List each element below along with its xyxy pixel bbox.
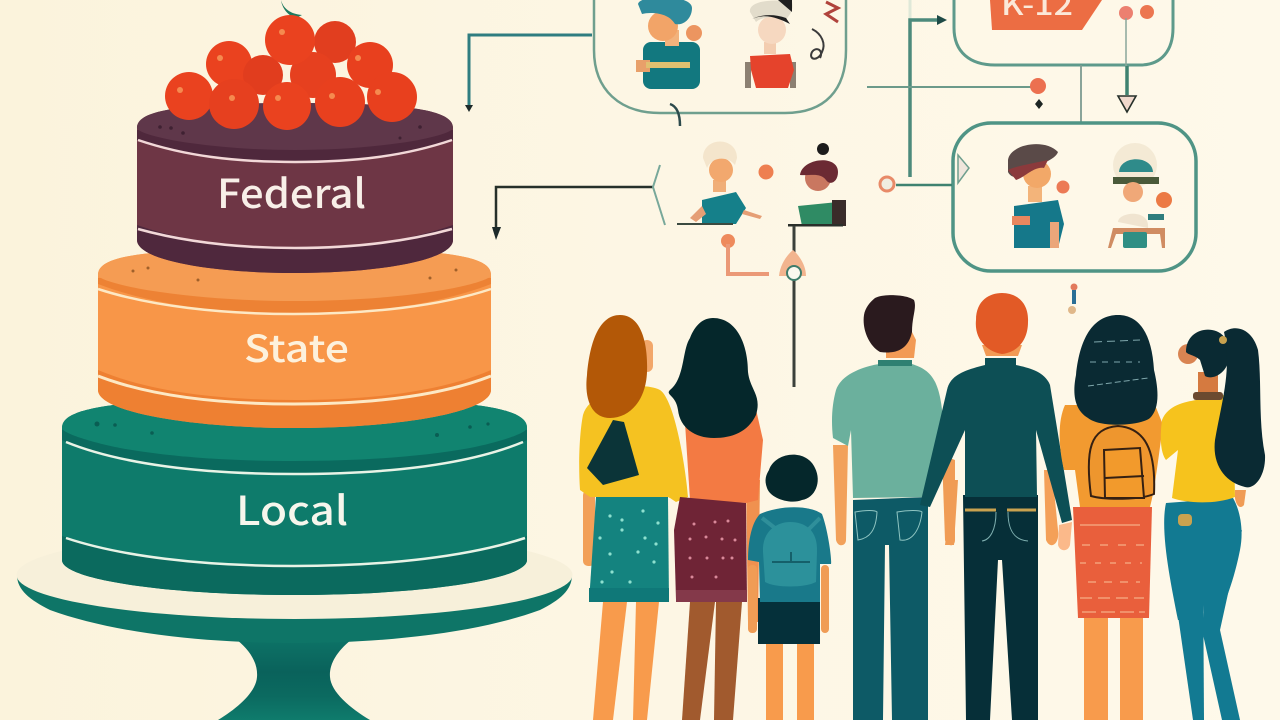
connector: vertical line with ring [779, 226, 806, 387]
connector: horizontal line with dot [867, 78, 1046, 109]
cake stand [16, 531, 572, 720]
panel: K-12 box [954, 0, 1173, 65]
icon: orange dot [758, 164, 774, 180]
arrow: branch to K-12 box [910, 0, 947, 177]
connector: orange elbow [721, 234, 769, 274]
connector: vertical between panels [1080, 65, 1082, 122]
figure: person at desk [1108, 143, 1172, 248]
figure: person in red shirt [745, 0, 796, 88]
icon: triangle pointer [958, 155, 969, 183]
figure: boy with backpack [748, 455, 831, 720]
icon: squiggles [811, 2, 838, 59]
cake tier: State [98, 248, 491, 428]
tomatoes on top of cake [165, 0, 417, 130]
skirt [589, 497, 669, 602]
group: middle two figures [677, 142, 846, 226]
icon: tiny blue figure [1068, 284, 1078, 314]
figure: man with teal shirt [832, 295, 955, 720]
connector: ring and line to lower panel [880, 177, 952, 191]
label: Federal: Federal [217, 162, 366, 220]
handbag [587, 420, 639, 485]
figure: person with hair bun [788, 143, 846, 226]
icon: apples [1119, 5, 1154, 20]
figure: woman with orange backpack and skirt [1060, 315, 1163, 720]
label: State: State [244, 319, 349, 373]
figure: man with red hair [920, 293, 1072, 720]
arrow: middle group to cake [492, 165, 665, 240]
label tag: K-12 [990, 0, 1102, 30]
figure: woman with long ponytail [1161, 328, 1265, 720]
panel: lower right diagram box [953, 123, 1196, 271]
panel: top left diagram box [594, 0, 846, 126]
figure: person with white hat [677, 142, 762, 225]
arrow: top left box to cake [465, 35, 592, 112]
cake tier: Local [62, 398, 527, 595]
figure: woman with auburn hair [579, 315, 688, 720]
figure: person with brown cap [1008, 144, 1070, 248]
icon: hook [670, 104, 680, 126]
figure: teal turban person [636, 0, 702, 89]
cake tier: Federal [137, 103, 453, 273]
backpack [1089, 426, 1154, 499]
figure: woman with black hair and maroon skirt [669, 318, 763, 720]
arrow: apple down to panel [1118, 18, 1136, 112]
label: Local: Local [236, 479, 348, 537]
